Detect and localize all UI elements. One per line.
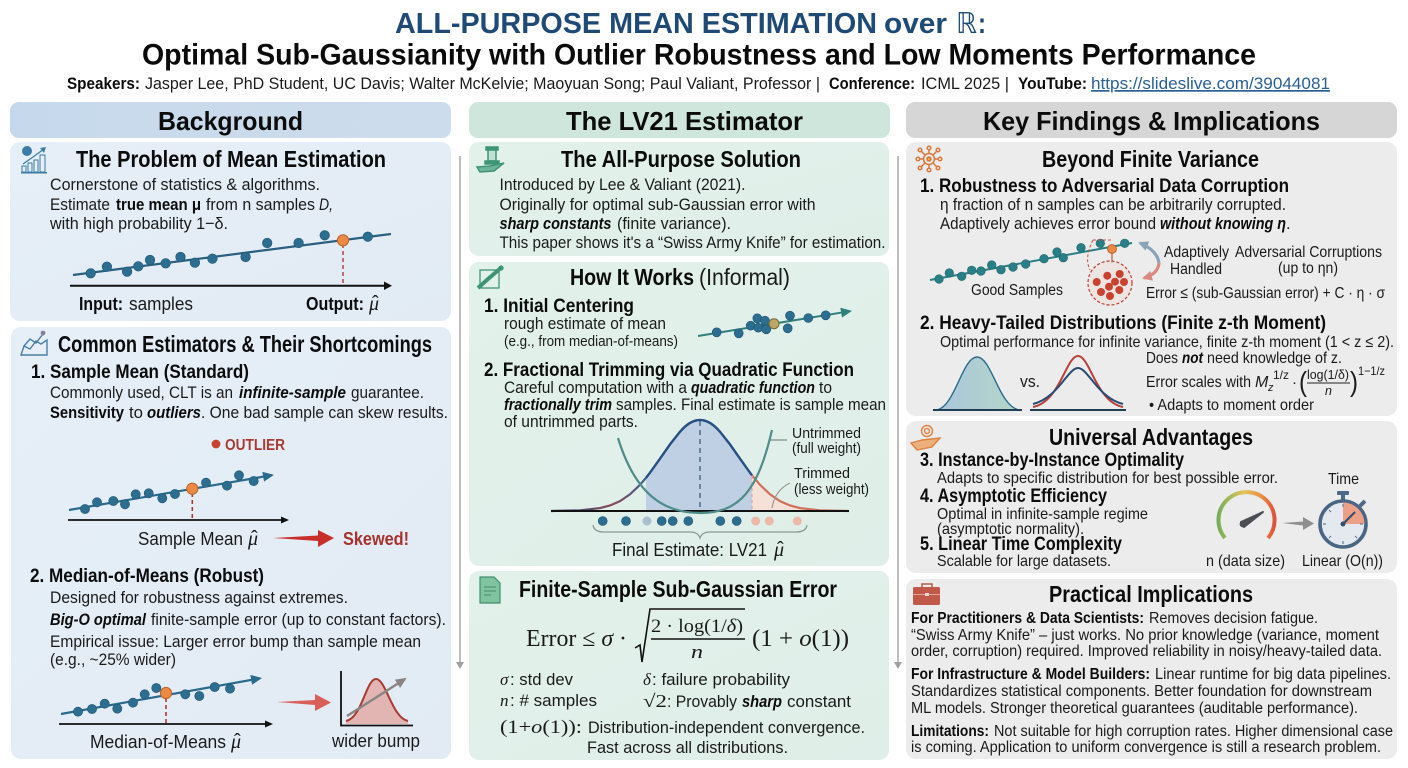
- column header: Background: Background: [158, 106, 303, 136]
- finding 1: robustness: η fraction of n samples can be arbitrarily corrupted.: [940, 196, 1286, 214]
- label: adversarial corruptions: [1235, 244, 1382, 277]
- speakers line: YouTube:: [1018, 74, 1087, 93]
- label: final estimate: ˆ: [777, 538, 784, 560]
- item 1: Sample Mean: . One bad sample can skew results.: [201, 403, 448, 422]
- chart labels: [79, 292, 379, 315]
- legend of symbols: sharp: [742, 693, 782, 711]
- label: n data size: n (data size): [1206, 553, 1285, 570]
- item 1: Sample Mean: infinite-sample: [239, 383, 346, 402]
- panel: Finite-Sample Sub-Gaussian Error: [469, 571, 889, 760]
- label: adaptively handled: [1164, 244, 1229, 278]
- chart labels: Output:: [306, 294, 364, 314]
- chart labels: ˆ: [372, 292, 379, 314]
- heading: Common Estimators & Their Shortcomings: [58, 331, 432, 357]
- formula: n: [691, 642, 703, 663]
- speakers line: Jasper Lee, PhD Student, UC Davis; Walter McKelvie; Maoyuan Song; Paul Valiant, Professor |: [145, 74, 820, 93]
- label: final estimate: μ: [773, 539, 784, 561]
- advantages list: [920, 449, 1278, 570]
- legend of symbols: : Provably: [667, 693, 738, 711]
- legend of symbols: : failure probability: [652, 671, 791, 689]
- icon: rising bar chart: [21, 146, 47, 174]
- item 1: Sample Mean: 1. Sample Mean (Standard): [31, 361, 249, 383]
- legend of symbols: n: [500, 691, 508, 710]
- limitations: is coming. Application to uniform convergence is still a research problem.: [911, 739, 1381, 756]
- arrow: skewed: [273, 530, 334, 547]
- title line 1: over: [884, 8, 947, 40]
- heading: How It Works: [570, 264, 694, 290]
- label: sample mean: μ: [247, 528, 258, 550]
- intro text: with high probability 1−δ.: [49, 214, 228, 233]
- label: sample mean: ˆ: [251, 527, 258, 549]
- step 2: Fractional Trimming: quadratic function: [691, 379, 815, 397]
- formula: (1 + o(1)): [752, 626, 849, 652]
- column header: The LV21 Estimator: The LV21 Estimator: [566, 106, 803, 136]
- column flow arrow: left: [456, 156, 464, 669]
- advantages list: (asymptotic normality).: [937, 521, 1084, 538]
- column header: Key Findings: Key Findings & Implications: [983, 106, 1320, 136]
- speakers line: Conference:: [829, 74, 915, 93]
- icon: line chart: [21, 331, 47, 355]
- formula: error scaling: M: [1255, 374, 1269, 391]
- label: untrimmed: Untrimmed: [792, 425, 861, 442]
- panel: How It Works: [469, 262, 889, 566]
- icon: network hub: [916, 146, 942, 172]
- for infrastructure: For Infrastructure & Model Builders:: [911, 666, 1150, 683]
- formula: error scaling: 1/z: [1273, 368, 1289, 382]
- formula: Error ≤ σ ·: [526, 626, 627, 652]
- label: final estimate: Final Estimate: LV21: [612, 539, 767, 560]
- chart: gaussian vs heavy tail: [933, 356, 1126, 410]
- intro text: true mean μ: [116, 195, 201, 214]
- legend of symbols: δ: [643, 670, 652, 689]
- label: median of means: μ: [230, 731, 241, 753]
- heading: The Problem of Mean Estimation: [76, 146, 386, 172]
- for practitioners: For Practitioners & Data Scientists:: [911, 610, 1144, 627]
- panel: Universal Advantages: [906, 421, 1397, 573]
- intro text: Estimate: [50, 195, 110, 214]
- label: trimmed: Trimmed: [794, 465, 850, 482]
- formula: error scaling: 1−1/z: [1358, 364, 1385, 378]
- finding 2: heavy tails: not: [1182, 350, 1204, 367]
- icon: hand with coin: [911, 426, 940, 450]
- column flow arrow: right: [894, 156, 902, 669]
- finding 2: heavy tails: need knowledge of z.: [1207, 350, 1342, 367]
- label: skewed: Skewed!: [343, 528, 409, 549]
- legend of symbols: Distribution-independent convergence.: [588, 719, 865, 737]
- label: untrimmed: (full weight): [792, 440, 861, 457]
- label: adaptively handled: Adaptively: [1164, 244, 1229, 261]
- finding 2: heavy tails: [920, 312, 1394, 367]
- column header: The LV21 Estimator: [469, 102, 890, 138]
- chart: sample mean: [68, 471, 289, 524]
- step 2: Fractional Trimming: Careful computation with a: [504, 379, 688, 397]
- step 2: Fractional Trimming: 2. Fractional Trimming via Quadratic Function: [484, 359, 854, 381]
- step 1: Initial Centering: (e.g., from median-of-means): [504, 333, 678, 350]
- heading: Practical Implications: [1049, 581, 1253, 607]
- speakers line: [67, 74, 1330, 93]
- legend of symbols: (1+o(1)):: [500, 717, 582, 738]
- item 1: Sample Mean: [31, 361, 448, 422]
- icon: column on hand: [477, 147, 504, 172]
- label: trimmed: (less weight): [794, 481, 869, 498]
- icon: gauge: [1219, 492, 1275, 538]
- for practitioners: order, corruption) required. Improved reliability in noisy/heavy-tailed data.: [911, 643, 1382, 660]
- intro text: [49, 175, 333, 233]
- heading: The All-Purpose Solution: [561, 146, 801, 172]
- outlier marker: OUTLIER: [225, 437, 285, 454]
- speakers line: Speakers:: [67, 74, 140, 93]
- finding 2: heavy tails: Does: [1146, 350, 1178, 367]
- chart: wider bump: [341, 671, 413, 726]
- formula: error scaling: ·: [1292, 374, 1297, 391]
- legend of symbols: √2: [643, 691, 667, 711]
- label: sample mean: Sample Mean: [138, 528, 243, 549]
- heading: Beyond Finite Variance: [1042, 146, 1259, 172]
- advantages list: 3. Instance-by-Instance Optimality: [920, 449, 1184, 471]
- chart: median of means: [59, 678, 273, 728]
- item 2: Median-of-Means: [30, 565, 446, 669]
- finding 1: robustness: Adaptively achieves error bound: [940, 215, 1156, 233]
- column header: Background: [10, 102, 451, 138]
- step 2: Fractional Trimming: to: [819, 379, 832, 397]
- for infrastructure: [911, 666, 1391, 717]
- chart labels: Input:: [79, 294, 123, 314]
- advantages list: Optimal in infinite-sample regime: [937, 506, 1148, 523]
- item 2: Median-of-Means: (e.g., ~25% wider): [50, 650, 176, 669]
- item 1: Sample Mean: Commonly used, CLT is an: [50, 383, 233, 402]
- advantages list: 4. Asymptotic Efficiency: [920, 485, 1107, 507]
- item 1: Sample Mean: Sensitivity: [50, 403, 124, 422]
- icon: drafting tool: [478, 266, 503, 288]
- for practitioners: [911, 610, 1382, 660]
- legend of symbols: : # samples: [510, 692, 597, 710]
- description: Introduced by Lee & Valiant (2021).: [500, 175, 746, 194]
- panel: The Problem of Mean Estimation: [10, 142, 451, 321]
- heading: [570, 264, 790, 290]
- column header: Key Findings: [906, 102, 1397, 138]
- finding 1: robustness: .: [1286, 215, 1291, 233]
- chart: good samples and corruptions: [930, 239, 1132, 305]
- description: [500, 175, 886, 252]
- label: untrimmed: [770, 425, 861, 457]
- for infrastructure: ML models. Stronger theoretical guarantees (auditable performance).: [911, 700, 1358, 717]
- chart: initial centering: [698, 311, 850, 338]
- icon: stopwatch: [1320, 491, 1366, 547]
- label: median of means: ˆ: [234, 730, 241, 752]
- speakers line: https://slideslive.com/39044081: [1091, 74, 1330, 93]
- formula: 2 · log(1/ δ): [651, 616, 743, 637]
- item 2: Median-of-Means: Big-O optimal: [50, 610, 147, 629]
- description: Originally for optimal sub-Gaussian error with: [500, 195, 816, 214]
- label: good samples: Good Samples: [971, 282, 1063, 299]
- step 2: Fractional Trimming: [484, 359, 886, 431]
- step 1: Initial Centering: rough estimate of mean: [504, 315, 666, 333]
- limitations: [911, 723, 1393, 756]
- label: trimmed: [772, 465, 869, 508]
- for infrastructure: Linear runtime for big data pipelines.: [1155, 666, 1391, 683]
- step 2: Fractional Trimming: fractionally trim: [504, 396, 612, 414]
- label: linear: Linear (O(n)): [1302, 553, 1383, 570]
- arrows: adaptively handled: [1140, 243, 1159, 278]
- formula: [526, 609, 849, 663]
- intro text: Cornerstone of statistics & algorithms.: [50, 175, 320, 194]
- formula: error scaling: z: [1267, 382, 1274, 394]
- heading: Finite-Sample Sub-Gaussian Error: [519, 576, 837, 602]
- panel: Beyond Finite Variance: [906, 142, 1397, 416]
- formula: error scaling: Error scales with: [1146, 374, 1251, 391]
- step 1: Initial Centering: 1. Initial Centering: [484, 295, 634, 317]
- title line 1: ℝ: [956, 6, 977, 40]
- item 2: Median-of-Means: Designed for robustness against extremes.: [50, 588, 348, 607]
- legend of symbols: [500, 670, 865, 757]
- for infrastructure: Standardizes statistical components. Better foundation for downstream: [911, 683, 1372, 700]
- arrow: to wider bump: [277, 694, 331, 711]
- finding 2: heavy tails: 2. Heavy-Tailed Distributions (Finite z-th Moment): [920, 312, 1326, 334]
- for practitioners: “Swiss Army Knife” – just works. No prior knowledge (variance, moment: [911, 627, 1380, 644]
- label: adversarial corruptions: Adversarial Corruptions: [1235, 244, 1382, 261]
- item 2: Median-of-Means: finite-sample error (up to constant factors).: [151, 610, 446, 629]
- icon: briefcase: [913, 584, 940, 605]
- description: This paper shows it's a “Swiss Army Knife” for estimation.: [500, 233, 886, 252]
- description: sharp constants: [500, 214, 612, 233]
- bullet: • Adapts to moment order: [1149, 397, 1315, 414]
- arrow: gauge to stopwatch: [1282, 517, 1314, 530]
- panel: Practical Implications: [906, 579, 1397, 759]
- speakers line: ICML 2025 |: [921, 74, 1009, 93]
- advantages list: Scalable for large datasets.: [937, 553, 1111, 570]
- step 2: Fractional Trimming: samples. Final estimate is sample mean: [616, 396, 886, 414]
- chart labels: samples: [129, 294, 193, 314]
- formula: error scaling: n: [1325, 384, 1332, 398]
- finding 1: robustness: without knowing η: [1160, 215, 1286, 233]
- limitations: Limitations:: [911, 723, 989, 740]
- chart: gaussian vs heavy tail: vs.: [1020, 373, 1040, 391]
- title block: [67, 6, 1330, 93]
- label: time: Time: [1328, 471, 1359, 488]
- item 1: Sample Mean: to: [129, 403, 143, 422]
- formula: error scaling: log(1/δ): [1307, 368, 1349, 382]
- step 1: Initial Centering: [484, 295, 678, 350]
- title line 1: :: [978, 8, 986, 40]
- legend of symbols: : std dev: [510, 671, 574, 689]
- intro text: D,: [319, 195, 333, 214]
- formula: error scaling: ): [1350, 366, 1358, 397]
- panel: Common Estimators: [11, 327, 451, 759]
- title line 1: ALL-PURPOSE MEAN ESTIMATION: [395, 8, 877, 40]
- finding 1: robustness: [920, 175, 1291, 233]
- item 2: Median-of-Means: Empirical issue: Larger error bump than sample mean: [50, 632, 421, 651]
- label: median of means: Median-of-Means: [90, 731, 226, 752]
- item 1: Sample Mean: guarantee.: [351, 383, 424, 402]
- finding 1: robustness: 1. Robustness to Adversarial Data Corruption: [920, 175, 1289, 197]
- item 1: Sample Mean: outliers: [147, 403, 201, 422]
- panel: The All-Purpose Solution: [469, 142, 889, 256]
- step 2: Fractional Trimming: of untrimmed parts.: [504, 413, 638, 431]
- chart: bell curve with quadratic trimming: [551, 420, 849, 538]
- item 2: Median-of-Means: 2. Median-of-Means (Robust): [30, 565, 264, 587]
- heading: Universal Advantages: [1049, 424, 1253, 450]
- chart: samples on a line: [70, 230, 392, 290]
- legend of symbols: constant: [787, 693, 851, 711]
- intro text: from n samples: [206, 195, 315, 214]
- formula: error scaling: [1146, 364, 1385, 398]
- advantages list: 5. Linear Time Complexity: [920, 533, 1122, 555]
- label: adversarial corruptions: (up to ηn): [1278, 260, 1338, 277]
- icon: document: [480, 577, 500, 603]
- legend of symbols: Fast across all distributions.: [587, 739, 788, 757]
- label: adaptively handled: Handled: [1170, 261, 1222, 278]
- heading: (Informal): [699, 264, 790, 290]
- advantages list: Adapts to specific distribution for best possible error.: [937, 470, 1278, 487]
- title line 2: Optimal Sub-Gaussianity with Outlier Robustness and Low Moments Performance: [142, 38, 1256, 72]
- chart labels: μ: [368, 293, 379, 315]
- for practitioners: Removes decision fatigue.: [1149, 610, 1318, 627]
- formula: error scaling: (: [1299, 366, 1308, 397]
- legend of symbols: σ: [500, 670, 509, 689]
- label: wider bump: wider bump: [331, 730, 420, 751]
- description: (finite variance).: [617, 214, 731, 233]
